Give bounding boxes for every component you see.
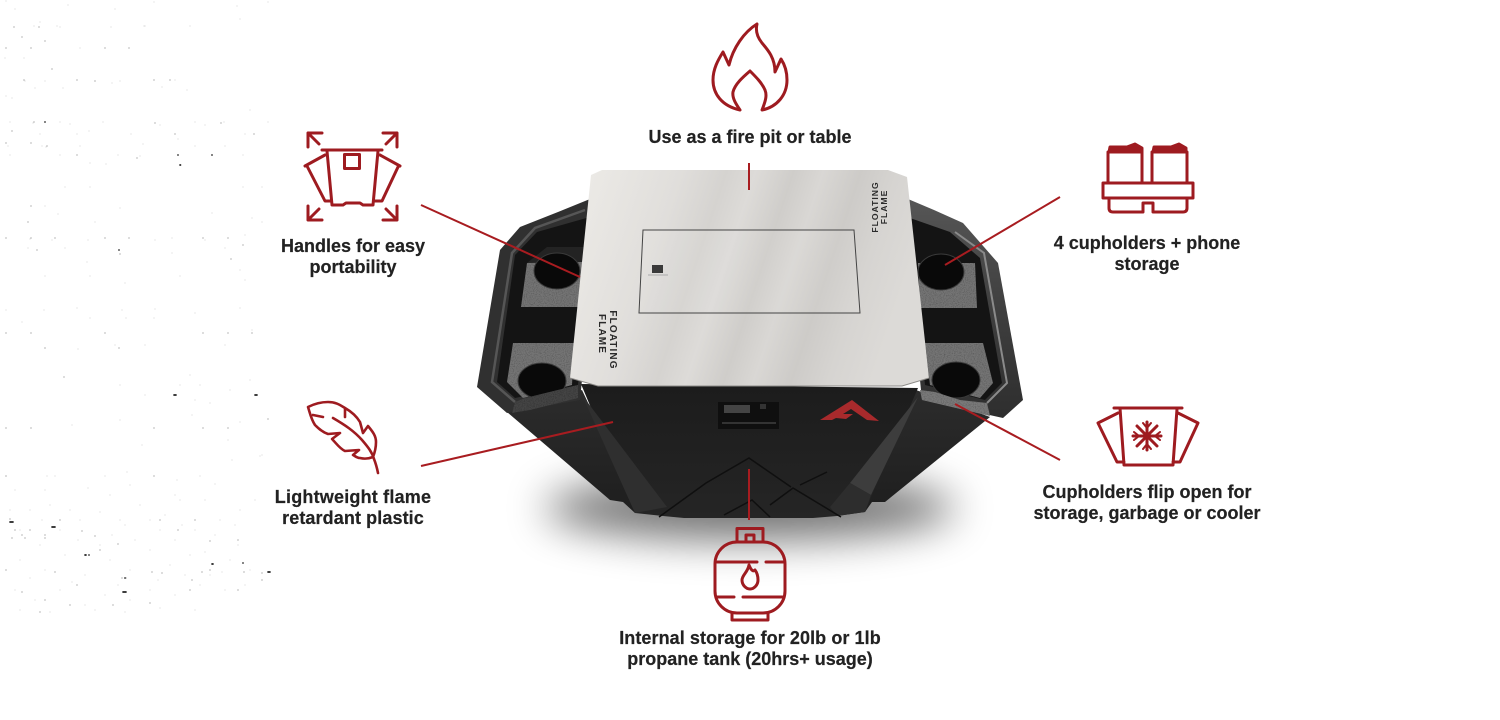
leader line: cupholders [945,197,1060,265]
lower right corner panel [830,483,871,516]
label: Cupholders flip open for [1042,482,1252,502]
right tray rim [955,232,1007,403]
brand text left: FLAME [596,314,607,354]
left cup holes [518,253,580,399]
leader line: handles [421,205,580,277]
left flip handle [512,385,578,413]
icon: two cans in holder [1103,144,1193,212]
left upper cupholder block [521,262,582,307]
brand text right [870,181,889,233]
icon: expanding tray [305,133,400,220]
feature: propane storage: propane tank (20hrs+ usage) [627,649,873,669]
lower right side [860,390,990,512]
brand text right: FLOATING [870,181,880,233]
icon: propane tank [715,528,785,620]
left upper ledge [527,247,590,263]
background speckle texture [5,1,270,612]
feature: flip open storage [1033,408,1261,523]
feature: fire pit or table [648,24,852,147]
right upper cupholder block [918,263,977,308]
lower left side [507,390,640,513]
right tray shell [908,199,1023,418]
feature: lightweight plastic [275,402,431,528]
front face [581,384,918,518]
leader line: flip open [955,404,1060,460]
label: Handles for easy [281,236,425,256]
left tray shell [477,199,590,413]
feature: cupholders: storage [1114,254,1180,274]
snowflake [1133,422,1161,450]
feature: propane storage [619,528,881,669]
right lower cupholder block [925,343,993,398]
label: 4 cupholders + phone [1054,233,1240,253]
steel top plate [570,170,929,386]
brand logo [820,400,879,421]
icon: flame [713,24,787,110]
ground shadow [545,476,955,540]
left tray rim [492,210,585,402]
product: Floating Flame fire pit table [477,170,1023,540]
label: Use as a fire pit or table [648,127,852,147]
brand text left [596,310,618,370]
right flip handle [920,390,990,416]
hatch panel [639,230,860,313]
leader line: fire pit [748,163,750,190]
left tray interior [497,217,590,398]
front mountain grooves [659,458,841,517]
leader line: propane [748,469,750,520]
right tray interior [910,218,1002,400]
brand text right: FLAME [879,190,889,224]
feature: cupholders [1054,144,1240,274]
icon: feather [308,402,378,473]
feature: lightweight plastic: retardant plastic [282,508,424,528]
hatch latch [648,265,668,275]
feature: handles: portability [309,257,397,277]
feature: handles [281,133,425,277]
label: Lightweight flame [275,487,431,507]
right cup holes [918,254,980,398]
label: Internal storage for 20lb or 1lb [619,628,881,648]
right facet [850,397,918,495]
left facet [582,395,667,513]
plate front edge [570,378,929,386]
feature: flip open storage: storage, garbage or cooler [1033,503,1261,523]
USB port panel [718,402,779,429]
left lower cupholder block [507,343,574,398]
brand text left: FLOATING [607,310,618,370]
icon: cooler [1098,408,1198,465]
leader line: plastic [421,422,613,466]
